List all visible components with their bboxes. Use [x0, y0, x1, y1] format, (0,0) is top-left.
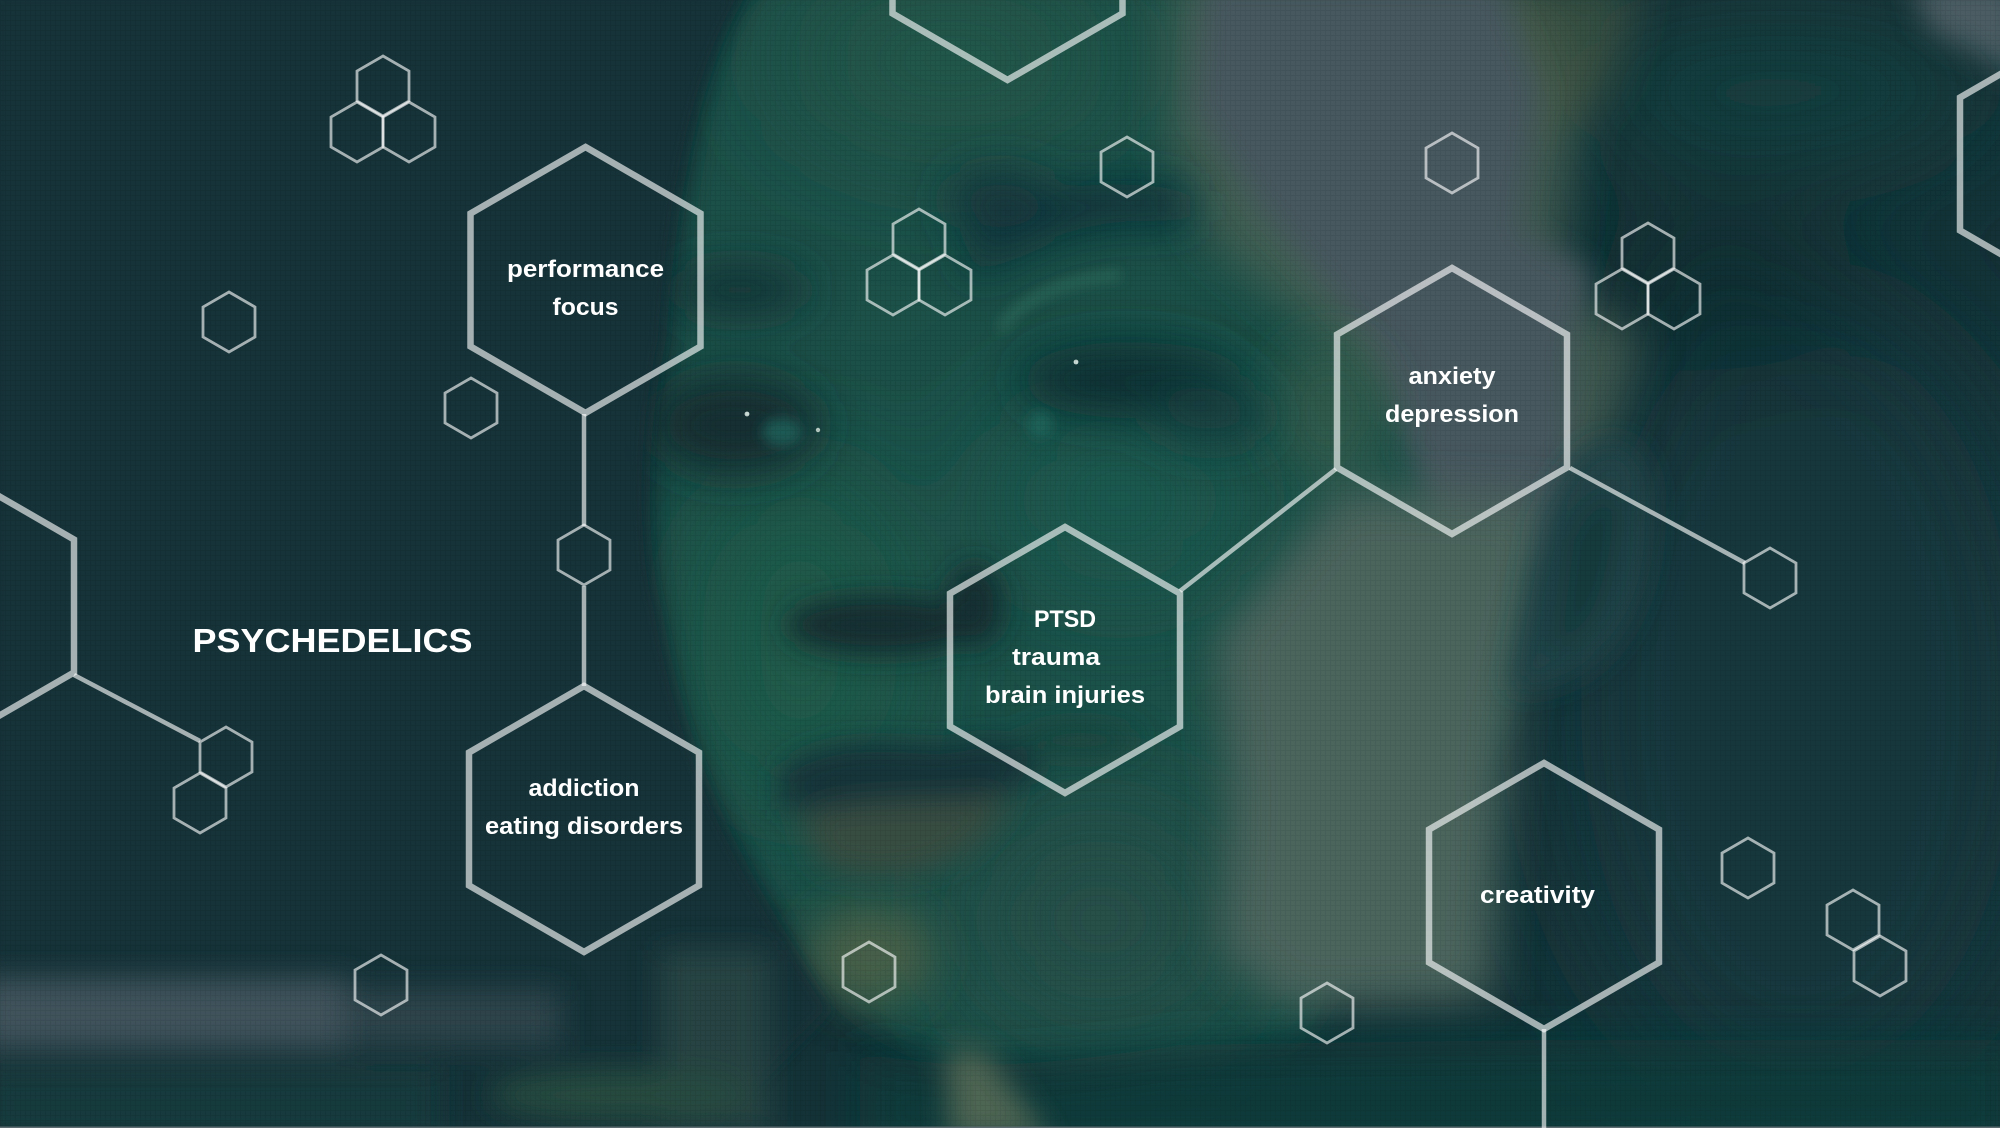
hexagon cluster: forehead trio — [867, 209, 971, 315]
hexagon cluster: top left trio — [331, 56, 435, 162]
partial hexagon: left edge — [0, 473, 74, 739]
ear — [1510, 441, 1651, 690]
large hexagon: PTSD, trauma, brain injuries — [950, 527, 1180, 793]
connector lines — [74, 414, 1745, 1128]
large hexagon: PTSD, trauma, brain injuries: trauma — [1012, 644, 1101, 671]
large hexagon: addiction, eating disorders: addiction — [528, 775, 640, 802]
bottom band — [0, 950, 770, 1128]
large hexagon: creativity: creativity — [1480, 882, 1596, 909]
large hexagon: PTSD, trauma, brain injuries: brain injuries — [985, 682, 1145, 709]
large hexagon: performance focus — [470, 147, 700, 413]
large hexagon: anxiety depression: anxiety — [1408, 363, 1496, 390]
large hexagon: performance focus: performance — [507, 256, 664, 283]
partial hexagon: top edge — [892, 0, 1122, 80]
eye glints — [745, 360, 1078, 432]
hexagon cluster: left pair — [174, 727, 252, 833]
hexagon cluster: upper right trio — [1596, 223, 1700, 329]
large hexagon: anxiety depression — [1337, 268, 1567, 534]
nose shadow and lips — [780, 563, 1140, 876]
large hexagon: anxiety depression: depression — [1385, 401, 1519, 428]
large hexagon: creativity — [1429, 763, 1659, 1029]
large hexagon: addiction, eating disorders: eating disorders — [485, 813, 683, 840]
title: PSYCHEDELICS — [192, 622, 472, 659]
dark surround: hair behind jaw — [0, 0, 830, 1128]
small hexagons — [203, 133, 1796, 1043]
hexagon cluster: lower right pair — [1827, 890, 1906, 996]
large hexagon: performance focus: focus — [552, 294, 618, 321]
partial hexagon: right edge — [1960, 31, 2000, 297]
large hexagon: PTSD, trauma, brain injuries: PTSD — [1034, 606, 1096, 633]
eyes and brows — [650, 168, 1270, 475]
large hexagon: addiction, eating disorders — [469, 686, 699, 952]
